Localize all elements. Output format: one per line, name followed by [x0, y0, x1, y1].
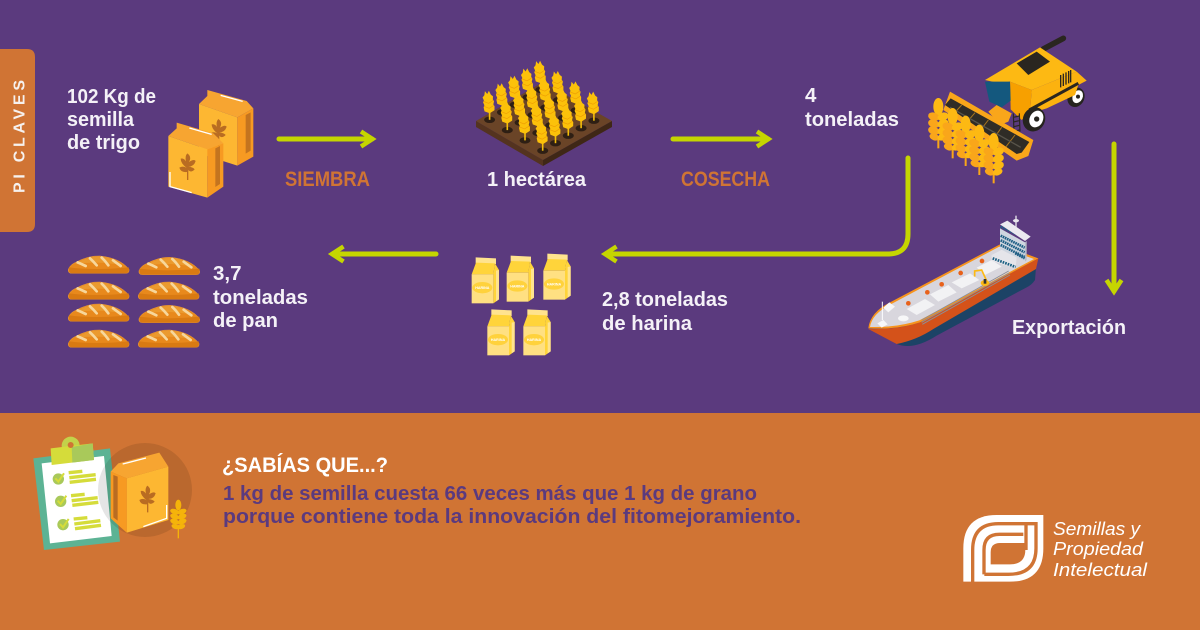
callout body: 1 kg de semilla cuesta 66 veces más que 1 kg de grano	[223, 482, 757, 505]
label: COSECHA: COSECHA	[681, 168, 770, 191]
orange deck marks	[906, 259, 984, 306]
rails	[922, 271, 1010, 324]
callout: ¿Sabías que...?	[222, 454, 801, 528]
soil block	[476, 82, 612, 166]
arrow: field to harvest	[673, 132, 768, 146]
rear wheel	[1064, 85, 1088, 110]
superstructure	[992, 216, 1031, 268]
bow fittings	[877, 302, 909, 328]
logo text: Semillas y	[1053, 519, 1141, 539]
arrow: flour to bread	[332, 246, 436, 262]
exhaust pipe	[1043, 38, 1063, 49]
side tab: PI CLAVES: PI CLAVES	[12, 80, 28, 193]
deck	[868, 244, 1038, 329]
clipboard	[33, 437, 120, 550]
front wheel	[1019, 104, 1049, 135]
cargo hatches	[907, 260, 1002, 315]
machine body	[985, 47, 1087, 120]
text: 102 Kg de semilla de trigo: de trigo	[67, 131, 140, 154]
callout body: porque contiene toda la innovación del fitomejoramiento.	[223, 505, 801, 528]
header	[943, 92, 1033, 161]
label: 1 hectárea: 1 hectárea	[487, 168, 587, 191]
icon: checklist, seed bag and wheat	[33, 437, 192, 550]
logo text: Intelectual	[1053, 560, 1148, 580]
small wheat ear	[169, 500, 187, 538]
text: 102 Kg de semilla de trigo: semilla	[67, 108, 135, 131]
hull orange	[868, 258, 1038, 344]
logo mark	[963, 515, 1043, 582]
back bag	[199, 90, 253, 166]
checklist rows	[53, 471, 101, 530]
logo: Semillas y Propiedad Intelectual	[963, 515, 1148, 582]
logo text	[1053, 519, 1148, 580]
background: purple panel	[0, 0, 1200, 413]
text: 2,8 toneladas de harina: de harina	[602, 312, 693, 335]
label: Exportación: Exportación	[1012, 316, 1126, 339]
arrow: harvest to flour	[605, 158, 908, 262]
text: 4 toneladas: 4	[805, 84, 817, 107]
text: 2,8 toneladas de harina	[602, 288, 728, 335]
background: orange footer panel	[0, 413, 1200, 630]
label: SIEMBRA: SIEMBRA	[285, 168, 370, 191]
text: 102 Kg de semilla de trigo	[67, 85, 156, 154]
text: 3,7 toneladas de pan	[213, 262, 308, 332]
arrow: harvest to export	[1106, 144, 1122, 292]
icon: bread loaves	[68, 256, 200, 347]
wheat ears	[927, 98, 1005, 183]
side tab: PI CLAVES	[0, 49, 35, 232]
backdrop circle	[98, 443, 192, 537]
arrow: seed to field	[279, 132, 372, 146]
ladder	[1013, 113, 1020, 133]
text: 102 Kg de semilla de trigo: 102 Kg de	[67, 85, 156, 108]
text: 4 toneladas: toneladas	[805, 108, 899, 131]
wheat plants	[482, 60, 600, 154]
text: 3,7 toneladas de pan: toneladas	[213, 286, 308, 309]
callout heading: ¿SABÍAS QUE...?	[222, 454, 388, 477]
text: 3,7 toneladas de pan: 3,7	[213, 262, 242, 285]
icon: combine harvester	[927, 38, 1088, 183]
text: 2,8 toneladas de harina: 2,8 toneladas	[602, 288, 728, 311]
icon: flour bags	[472, 254, 571, 355]
front bag	[168, 123, 223, 198]
text: 3,7 toneladas de pan: de pan	[213, 309, 278, 332]
icon: seed bags	[168, 90, 253, 198]
hull navy	[897, 268, 1036, 346]
callout body	[223, 482, 801, 528]
seed bag	[111, 453, 168, 533]
icon: wheat field	[476, 60, 612, 166]
icon: cargo ship	[868, 216, 1038, 346]
text: 4 toneladas	[805, 84, 899, 131]
logo text: Propiedad	[1053, 539, 1144, 559]
crane	[975, 270, 989, 286]
feeder	[988, 105, 1012, 125]
